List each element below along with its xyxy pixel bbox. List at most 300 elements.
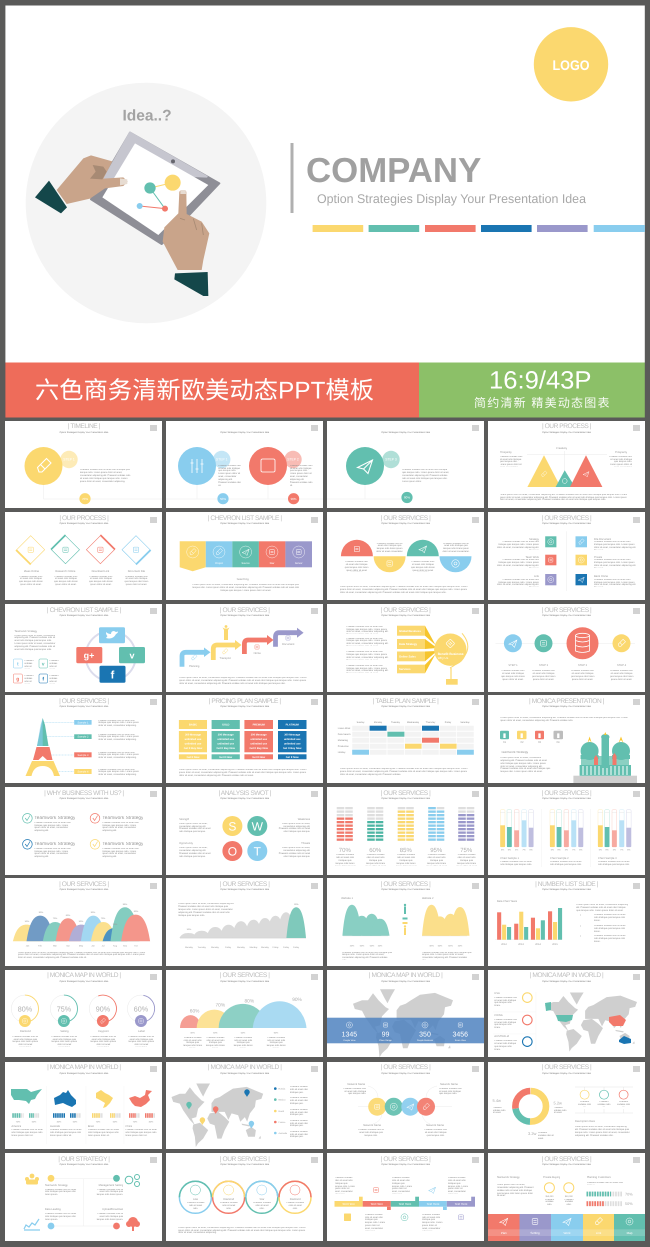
label: Diamond: [223, 1198, 234, 1201]
heading: [542, 515, 592, 525]
label: Prosperity: [615, 451, 627, 454]
tube chart: 5%: [529, 848, 533, 852]
label: Strength: [179, 818, 189, 821]
schedule table: Thursday: [426, 721, 436, 724]
label: Creativity: [556, 447, 567, 450]
heading: Option Strategies Display Your Presentation Idea: [381, 432, 430, 434]
heading: [166, 881, 323, 894]
text block: Praesent sodales odio sit amet odio.: [286, 1202, 304, 1210]
green info band: 16:9/43P: [489, 366, 592, 394]
swot circles: W: [252, 819, 264, 833]
label: Teamwork Strategy: [45, 1184, 68, 1187]
label: Bank Home: [594, 575, 608, 578]
heading: Option Strategies Display Your Presentation Idea: [381, 706, 430, 708]
slide: pricing plan: [166, 695, 323, 783]
text block: Praesent sodales odio sit amet odio tristique quis tempus odio lorem ipsum dolor sit amet.: [501, 670, 525, 681]
slide: number list: [488, 878, 645, 966]
eiffel tower chart: [26, 718, 92, 776]
text block: Lorem ipsum dolor sit amet, consectetur adipiscing elit. Praesent sodales odio sit amet odio tristique quis tempus.: [179, 823, 210, 833]
heading: Option Strategies Display Your Presentation Idea: [542, 981, 591, 983]
red title band: [5, 362, 419, 418]
tube chart: 4%: [515, 848, 518, 852]
chevron band: Source: [242, 562, 250, 565]
linked rings: [166, 1153, 323, 1241]
heading: Option Strategies Display Your Presentation Idea: [381, 1164, 430, 1166]
bell curve chart: Mar: [54, 945, 58, 948]
heading: [59, 515, 108, 525]
text block: Praesent sodales odio sit amet odio tristique quis tempus odio. Lorem ipsum dolor sit amet, consectetur adipiscing elit. Praesent sodales odio sit.: [218, 465, 241, 487]
text block: Praesent sodales odio.: [545, 1198, 554, 1206]
pricing columns: Get It Now: [187, 756, 201, 759]
heading: | CHEVRON LIST SAMPLE |: [208, 515, 282, 522]
label: Chart Sample 2: [550, 856, 569, 860]
heading: | TIMELINE |: [68, 423, 100, 430]
heading: [488, 881, 645, 894]
eiffel tower chart: Sample 3: [78, 754, 89, 757]
label: America: [11, 1125, 21, 1128]
bell curve chart: Jan: [26, 945, 30, 948]
text block: Praesent sodales odio sit amet odio tristique quis tempus odio.: [598, 861, 630, 866]
grey bell chart: Tuesday: [198, 946, 207, 949]
tiles, rings and people meters: Setting: [530, 1231, 540, 1235]
text block: Praesent sodales odio sit amet odio tristique quis tempus odio.: [343, 1088, 366, 1095]
pricing columns: [178, 720, 306, 760]
text block: Lorem ipsum dolor sit amet, consectetur adipiscing elit. Praesent sodales odio sit amet odio tristique quis tempus.: [179, 847, 210, 858]
swot circles: O: [228, 844, 237, 858]
text block: Praesent sodales odio sit amet odio tristique quis tempus odio. Lorem ipsum dolor sit amet, consectetur adipiscing.: [98, 752, 139, 759]
schedule table: Holiday: [338, 751, 346, 754]
tube chart: 9%: [557, 848, 561, 852]
bell curve chart: May: [79, 945, 84, 948]
heading: | OUR SERVICES |: [381, 1156, 430, 1162]
half circle wave: [340, 540, 472, 572]
world map and ring gauges: [488, 970, 645, 1058]
heading: | CHEVRON LIST SAMPLE |: [47, 606, 121, 614]
timeline graphic: STEP 1: [216, 457, 228, 461]
tube chart: 7%: [572, 848, 575, 852]
text block: Lorem ipsum dolor sit amet, consectetur adipiscing elit. Praesent sodales odio sit amet odio tristique quis tempus odio. Lorem ipsum dolor sit amet, consectetur adipiscing elit. Praesent sodales odio sit amet odio tristique quis tempus odio.: [178, 903, 234, 917]
logo badge: LOGO: [552, 57, 590, 73]
heading: | OUR SERVICES |: [220, 881, 269, 888]
text block: Lorem ipsum dolor sit amet, consectetur adipiscing elit. Praesent sodales odio sit amet odio tristique quis tempus odio. Lorem ipsum dolor sit amet, consectetur adipiscing elit. Praesent sodales odio sit amet odio tristique quis tempus. Lorem ipsum dolor sit amet.: [192, 584, 299, 592]
text block: Praesent sodales odio sit amet odio tristique quis tempus odio. Lorem ipsum dolor sit amet, consectetur adipiscing elit. Praesent sodales odio sit amet odio tristique quis tempus odio. Lorem ipsum dolor.: [402, 469, 449, 483]
tube chart: 7%: [620, 848, 623, 852]
twin bell charts: 40%: [458, 945, 462, 948]
twin bell charts: 40%: [429, 945, 434, 948]
diamond row: [16, 534, 152, 566]
label: Ideas Online: [24, 570, 39, 573]
map with pins and legend: Brazil: [279, 1109, 285, 1112]
label: Description Here: [575, 1120, 595, 1123]
heading: [327, 1064, 484, 1077]
world map and stat band: Place Range: [379, 1038, 393, 1041]
label: Teamwork Strategy: [14, 630, 37, 632]
world map and stat band: 3456: [453, 1031, 468, 1038]
country shapes with people meters: 70%: [16, 1120, 21, 1123]
timeline graphic: STEP 3: [385, 457, 397, 461]
label: Diamond: [20, 1030, 31, 1033]
text block: Praesent sodales odio sit amet odio tristique quis tempus odio.: [500, 861, 532, 866]
label: AUSTRALIA: [494, 1035, 509, 1038]
company tagline: Option Strategies Display Your Presentation Idea: [317, 192, 586, 206]
pricing columns: BASIC: [189, 724, 197, 726]
heading: | OUR PROCESS |: [542, 423, 591, 430]
schedule table: Wednesday: [407, 721, 420, 724]
text block: Praesent sodales odio sit amet odio tristique quis tempus odio lorem ipsum dolor sit amet.: [532, 670, 555, 681]
text block: Praesent sodales odio sit amet odio tristique quis tempus odio.: [424, 1129, 447, 1137]
schedule table: Production: [338, 745, 350, 748]
heading: [488, 972, 645, 985]
bell curve chart: 30%: [113, 923, 118, 926]
feature heading: Teamwork Strategy: [102, 842, 143, 847]
bar chart: 2013: [518, 943, 524, 946]
heading: Option Strategies Display Your Presentation Idea: [381, 889, 430, 891]
world map and stat band: [327, 970, 484, 1058]
label: Transport: [219, 657, 231, 660]
six colour bars: [313, 225, 645, 232]
twin bell charts: 40%: [378, 945, 382, 948]
heading: | OUR SERVICES |: [59, 698, 109, 704]
donut chart and rings: [488, 1062, 645, 1150]
world map and stat band: 99: [382, 1031, 390, 1038]
bell curve chart: Oct: [135, 945, 138, 948]
label: Research Online: [55, 570, 75, 573]
slide: our strategy: [5, 1153, 162, 1241]
heading: [219, 790, 271, 800]
step circles: [496, 627, 635, 660]
bell curve chart: 50%: [25, 920, 30, 923]
half circle chart: 70%: [216, 1002, 226, 1008]
text block: Praesent sodales odio sit amet odio tristique quis tempus odio lorem ipsum dolor sit amet.: [610, 670, 633, 681]
social diagram: t: [17, 662, 19, 668]
heading: [220, 606, 270, 617]
text block: Praesent sodales odio sit amet odio tristique quis tempus odio lorem ipsum.: [97, 1213, 123, 1221]
schedule table: Monday: [374, 721, 383, 724]
heading: [327, 1156, 484, 1168]
label: Weakness: [298, 818, 310, 821]
heading: Option Strategies Display Your Presentation Idea: [220, 889, 269, 891]
heading: Option Strategies Display Your Presentation Idea: [60, 889, 108, 891]
ring gauges: [5, 970, 162, 1058]
map with pins and legend: Russia: [279, 1087, 286, 1090]
chevron band: Server: [295, 562, 303, 565]
twin bell charts: [327, 878, 484, 966]
social diagram: v: [130, 650, 135, 660]
globe funnel diagram: Online Sales: [399, 654, 416, 658]
text block: Praesent sodales odio sit amet.: [538, 1132, 554, 1140]
heading: | OUR SERVICES |: [542, 1064, 591, 1071]
social diagram: [13, 627, 145, 684]
pricing columns: unlimited use: [251, 738, 268, 741]
heading: Option Strategies Display Your Presentation Idea: [60, 1164, 108, 1166]
heading: [373, 698, 438, 708]
label: 01: [503, 740, 506, 744]
timeline graphic: STEP 2: [287, 457, 299, 461]
globe funnel diagram: Why Us: [438, 656, 449, 660]
pricing columns: Get It Now: [219, 756, 233, 759]
heading: Option Strategies Display Your Presentation Idea: [60, 523, 108, 525]
timeline graphic: [24, 447, 162, 504]
heading: | OUR SERVICES |: [220, 972, 269, 979]
text block: Praesent sodales odio sit amet odio tristique quis tempus odio. Lorem ipsum dolor sit amet, consectetur adipiscing elit. Praesent sodales odio sit amet odio tristique quis tempus odio. Lorem ipsum dolor sit amet, consectetur adipiscing.: [80, 469, 130, 483]
label: Team Work: [525, 556, 539, 559]
label: Label: [138, 1030, 145, 1033]
triangle chart: [527, 451, 607, 487]
text block: Lorem ipsum dolor sit amet, consectetur adipiscing elit. Praesent sodales odio sit amet odio tristique quis tempus odio. Lorem ipsum dolor sit amet, consectetur adipiscing elit. Praesent sodales odio sit amet odio tristique quis tempus odio. Lorem ipsum dolor sit amet, consectetur adipiscing elit. Praesent sodales odio sit amet odio tristique quis tempus odio.: [340, 586, 467, 594]
country shapes with people meters: [5, 1062, 162, 1150]
icon squares: [545, 532, 587, 591]
text block: Praesent sodales odio sit amet odio tristique quis tempus odio. Lorem ipsum dolor sit amet, consectetur adipiscing.: [98, 734, 139, 741]
text block: Praesent sodales odio.: [564, 1198, 574, 1206]
heading: | MONICA MAP IN WORLD |: [208, 1064, 281, 1071]
text block: Lorem ipsum dolor sit amet, consectetur adipiscing elit. Praesent sodales odio sit amet odio tristique quis tempus odio lorem ipsum dolor sit amet.: [497, 1184, 533, 1197]
half circle chart: 50%: [213, 1031, 218, 1034]
bell curve chart: 70%: [101, 917, 106, 920]
feature heading: Teamwork Strategy: [102, 816, 143, 821]
heading: Option Strategies Display Your Presentation Idea: [381, 981, 430, 983]
slide: services linked rings: [166, 1153, 323, 1241]
pricing columns: Get It Buy Now: [250, 747, 269, 750]
timeline graphic: STEP 1: [64, 457, 75, 461]
heading: [208, 515, 282, 525]
ribbon band: Text Here: [455, 1202, 468, 1206]
text block: Lorem ipsum dolor sit amet, consectetur adipiscing elit. Praesent sodales odio sit amet odio tristique quis tempus.: [279, 823, 310, 833]
ring gauges: 60%: [134, 1004, 149, 1013]
company divider: [290, 143, 294, 213]
heading: | MONICA MAP IN WORLD |: [530, 972, 603, 979]
text block: Praesent sodales odio sit amet odio tristique quis tempus odio.: [439, 1088, 462, 1095]
pricing columns: unlimited use: [218, 738, 235, 741]
heading: [542, 790, 592, 800]
label: Private: [594, 556, 602, 559]
grey bell chart: Monday: [185, 946, 194, 949]
label: Like: [193, 1198, 198, 1201]
label: Keypoint: [98, 1030, 109, 1033]
twin bell charts: 50%: [360, 945, 364, 948]
grey bell chart: 90%: [294, 903, 299, 906]
pricing columns: unlimited use: [185, 738, 202, 741]
label: Network Name: [347, 1083, 365, 1086]
country shapes with people meters: 70%: [133, 1120, 138, 1123]
background circle: [26, 83, 266, 323]
heading: | OUR SERVICES |: [381, 881, 430, 888]
feature heading: Teamwork Strategy: [34, 816, 75, 821]
heading: | MONICA MAP IN WORLD |: [47, 1064, 121, 1071]
heading: [488, 1156, 645, 1168]
text block: Praesent sodales odio sit amet odio tristique quis tempus odio.: [358, 1129, 384, 1137]
heading: | OUR SERVICES |: [59, 881, 109, 888]
map with pins and legend: Australia: [279, 1131, 288, 1134]
heading: Option Strategies Display Your Presentation Idea: [381, 798, 430, 800]
pricing columns: unlimited use: [284, 738, 301, 741]
heading: | OUR PROCESS |: [59, 515, 108, 522]
label: Opportunity: [179, 842, 193, 845]
tiles, rings and people meters: Link: [596, 1231, 602, 1235]
label: Searching: [237, 578, 249, 581]
text block: Lorem ipsum dolor sit amet, consectetur adipiscing elit. Praesent sodales odio sit amet odio tristique quis tempus odio. Lorem ipsum dolor sit amet, consectetur adipiscing elit. Praesent sodales odio sit amet odio tristique quis tempus odio. Lorem ipsum dolor sit amet, consectetur adipiscing.: [178, 1227, 306, 1234]
heading: [327, 972, 484, 985]
heading: Option Strategies Display Your Presentation Idea: [542, 615, 591, 617]
schedule table: Lorem Work: [338, 727, 351, 730]
schedule table: Tuesday: [391, 721, 401, 724]
heading: Option Strategies Display Your Presentation Idea: [542, 1073, 591, 1075]
label: STEP 3: [578, 664, 587, 667]
heading: [166, 1064, 323, 1077]
slide: chevron list: [166, 512, 323, 600]
tiles, rings and people meters: Plan: [501, 1231, 507, 1235]
slide: world map with pins: [166, 1062, 323, 1149]
dash column chart: 85%: [400, 847, 413, 854]
text block: Lorem ipsum dolor sit amet, consectetur adipiscing elit. Praesent sodales odio sit amet odio tristique quis tempus odio. Lorem ipsum dolor sit amet, consectetur adipiscing elit. Praesent sodales odio sit amet odio tristique quis tempus odio. Lorem ipsum dolor sit amet, consectetur adipiscing elit. Praesent sodales odio sit amet odio tristique quis tempus odio.: [179, 677, 307, 685]
text block: Praesent sodales odio sit amet odio tristique quis tempus odio lorem.: [494, 997, 517, 1007]
text block: Praesent sodales odio sit amet odio tristique quis tempus odio. Lorem ipsum dolor sit amet, consectetur adipiscing elit.: [34, 822, 71, 832]
heading: | OUR SERVICES |: [381, 515, 430, 522]
slide: table plan: [327, 695, 484, 783]
label: Chart Sample 3: [598, 856, 617, 860]
idea caption: Idea..?: [122, 108, 172, 124]
ribbon band: Text Here: [427, 1202, 440, 1206]
globe funnel diagram: Services: [399, 667, 411, 671]
heading: Option Strategies Display Your Presentation Idea: [60, 615, 108, 617]
heading: Option Strategies Display Your Presentation Idea: [542, 798, 591, 800]
text block: Praesent sodales odio sit amet odio tristique quis.: [290, 1131, 308, 1138]
text block: Lorem ipsum dolor sit amet, consectetur adipiscing elit. Praesent sodales odio sit amet odio tristique quis tempus odio. Lorem ipsum dolor sit amet, consectetur adipiscing elit. Praesent sodales odio sit amet odio tristique quis tempus odio. Lorem ipsum dolor sit amet, consectetur adipiscing elit. Praesent sodales odio sit.: [18, 952, 145, 959]
slide: services donut: [488, 1062, 645, 1149]
twin bell charts: 40%: [350, 945, 354, 948]
text block: Praesent sodales odio sit amet odio tristique quis tempus odio lorem ipsum dolor sit amet consectetur.: [443, 543, 469, 553]
dash column chart: [336, 807, 474, 854]
grey bell chart: Monday: [237, 946, 246, 949]
label: USA: [494, 992, 500, 995]
label: Private Buying: [543, 1176, 560, 1179]
pricing columns: GOLD: [222, 724, 230, 726]
heading: Option Strategies Display Your Presentation Idea: [60, 1073, 108, 1075]
pricing columns: 300 Message: [251, 734, 267, 736]
tiles, rings and people meters: $50,000: [565, 1195, 574, 1198]
tiles, rings and people meters: $50,000: [545, 1195, 554, 1198]
text block: Praesent sodales odio sit amet odio tristique quis tempus odio lorem ipsum dolor sit.: [50, 1129, 81, 1137]
pricing columns: 300 Message: [185, 734, 202, 736]
slide: services dash bars: [327, 787, 484, 875]
label: China: [125, 1125, 132, 1128]
label: Planning Customers: [587, 1176, 611, 1179]
slide: services teal and yellow bells: [327, 878, 484, 966]
heading: | NUMBER LIST SLIDE |: [535, 881, 598, 888]
heading: Option Strategies Display Your Presentation Idea: [220, 1073, 269, 1075]
schedule table: [338, 721, 474, 755]
chevron band: Project: [215, 562, 224, 565]
slide: timeline steps 1 and 2: [166, 421, 323, 508]
heading: [542, 606, 592, 617]
bar chart: 2015: [552, 943, 558, 946]
label: 04: [556, 740, 560, 744]
dash column chart: 60%: [369, 847, 382, 854]
label: Download Link: [92, 570, 109, 573]
slide: services four steps: [488, 604, 645, 692]
pricing columns: unlimited use: [284, 742, 301, 746]
pricing columns: unlimited use: [185, 742, 202, 746]
heading: Option Strategies Display Your Presentation Idea: [542, 523, 591, 525]
slide: world map with highlights: [488, 970, 645, 1057]
tube chart: 9%: [605, 848, 609, 852]
slide: analysis swot: [166, 787, 323, 875]
heading: Option Strategies Display Your Presentation Idea: [60, 798, 108, 800]
heading: | OUR SERVICES |: [542, 1156, 591, 1162]
text block: Lorem ipsum dolor sit amet, consectetur adipiscing elit. Praesent sodales odio sit amet odio tristique quis tempus odio. Lorem ipsum dolor sit amet, consectetur adipiscing elit. Praesent sodales odio sit amet odio tristique quis tempus odio. Lorem ipsum dolor sit amet.: [500, 757, 550, 773]
bell curve chart: Jul: [102, 945, 105, 948]
timeline graphic: [327, 447, 413, 504]
text block: Praesent sodales odio sit amet odio.: [253, 1202, 271, 1210]
label: Prosperity: [500, 451, 512, 454]
text block: Praesent sodales odio sit amet odio tristique quis tempus odio. Lorem ipsum dolor sit amet, consectetur adipiscing.: [98, 720, 139, 727]
pricing columns: unlimited use: [218, 742, 235, 746]
text block: Praesent sodales odio sit amet odio tristique quis tempus odio lorem.: [594, 925, 625, 933]
label: Link: [534, 575, 539, 578]
eiffel tower chart: Sample 2: [78, 736, 89, 739]
chevron band: [180, 541, 312, 572]
heading: | OUR SERVICES |: [220, 1156, 269, 1162]
timeline graphic: 90%: [291, 496, 297, 500]
swot circles: [222, 816, 268, 861]
text block: Praesent sodales odio sit amet odio tristique quis tempus odio. Lorem ipsum dolor sit amet, consectetur adipiscing elit.: [34, 848, 71, 858]
slide: services arrows: [166, 604, 323, 692]
label: File Document: [594, 538, 611, 541]
slide: world map with stats band: [327, 970, 484, 1057]
heading: [542, 423, 591, 434]
globe funnel diagram: [397, 626, 468, 685]
heading: Option Strategies Display Your Presentation Idea: [220, 615, 269, 617]
heading: [209, 698, 281, 708]
social diagram: g: [17, 676, 20, 682]
heading: | MONICA MAP IN WORLD |: [47, 972, 121, 979]
heading: Option Strategies Display Your Presentation Idea: [542, 1164, 591, 1166]
world map and stat band: 1345: [342, 1031, 357, 1038]
twin bell charts: 60%: [370, 945, 374, 948]
label: Network Name: [440, 1083, 458, 1086]
heading: Option Strategies Display Your Presentation Idea: [381, 523, 430, 525]
donut chart and rings: 3.2w: [528, 1131, 537, 1136]
text block: Praesent sodales odio sit amet odio tristique quis tempus odio lorem ipsum dolor sit.: [88, 1129, 119, 1137]
grey bell chart: Monday: [250, 946, 258, 949]
label: Planning: [189, 664, 199, 668]
globe funnel diagram: Benefit Business: [438, 652, 464, 656]
text block: Praesent sodales odio sit amet odio tristique quis tempus odio.: [550, 861, 582, 866]
tiles, rings and people meters: 70%: [625, 1192, 633, 1196]
label: Management Setting: [99, 1184, 123, 1187]
step arrows: [180, 625, 304, 667]
text block: Praesent sodales odio sit amet odio tristique quis.: [290, 1109, 308, 1116]
pricing columns: 300 Message: [284, 734, 301, 736]
heading: [381, 515, 430, 525]
heading: | MONICA PRESENTATION |: [529, 698, 604, 704]
pricing columns: Get It Buy Now: [283, 747, 303, 750]
text block: Praesent sodales odio sit amet odio tristique quis tempus odio lorem ipsum dolor sit.: [11, 1129, 43, 1137]
slide: services tube bars: [488, 787, 645, 875]
label: Diamond: [290, 1198, 301, 1201]
heading: | OUR SERVICES |: [542, 790, 591, 796]
text block: Praesent sodales odio sit amet odio tristique quis tempus odio lorem.: [594, 914, 625, 922]
text block: Praesent sodales odio sit amet odio tristique quis tempus odio lorem ipsum.: [45, 1188, 76, 1196]
text block: Praesent sodales odio sit amet odio tristique quis tempus odio lorem.: [494, 1019, 517, 1029]
label: Data Chart Years: [497, 900, 517, 903]
strategy diagram: [5, 1153, 162, 1241]
text block: Praesent sodales odio sit amet odio tristique quis tempus odio. Lorem ipsum dolor sit amet, consectetur adipiscing.: [98, 768, 139, 776]
network circles: [327, 1062, 484, 1150]
timeline graphic: 70%: [82, 496, 89, 500]
text block: Lorem ipsum dolor sit amet, consectetur adipiscing elit. Praesent sodales odio sit amet odio tristique quis tempus odio. Lorem ipsum dolor sit amet, consectetur adipiscing elit. Praesent sodales odio sit amet odio tristique quis tempus odio. Lorem ipsum dolor sit amet, consectetur adipiscing elit. Praesent sodales odio sit amet odio tristique quis tempus odio.: [500, 494, 627, 501]
bar chart: 2014: [535, 943, 541, 946]
bell curve chart: Jun: [92, 945, 96, 948]
